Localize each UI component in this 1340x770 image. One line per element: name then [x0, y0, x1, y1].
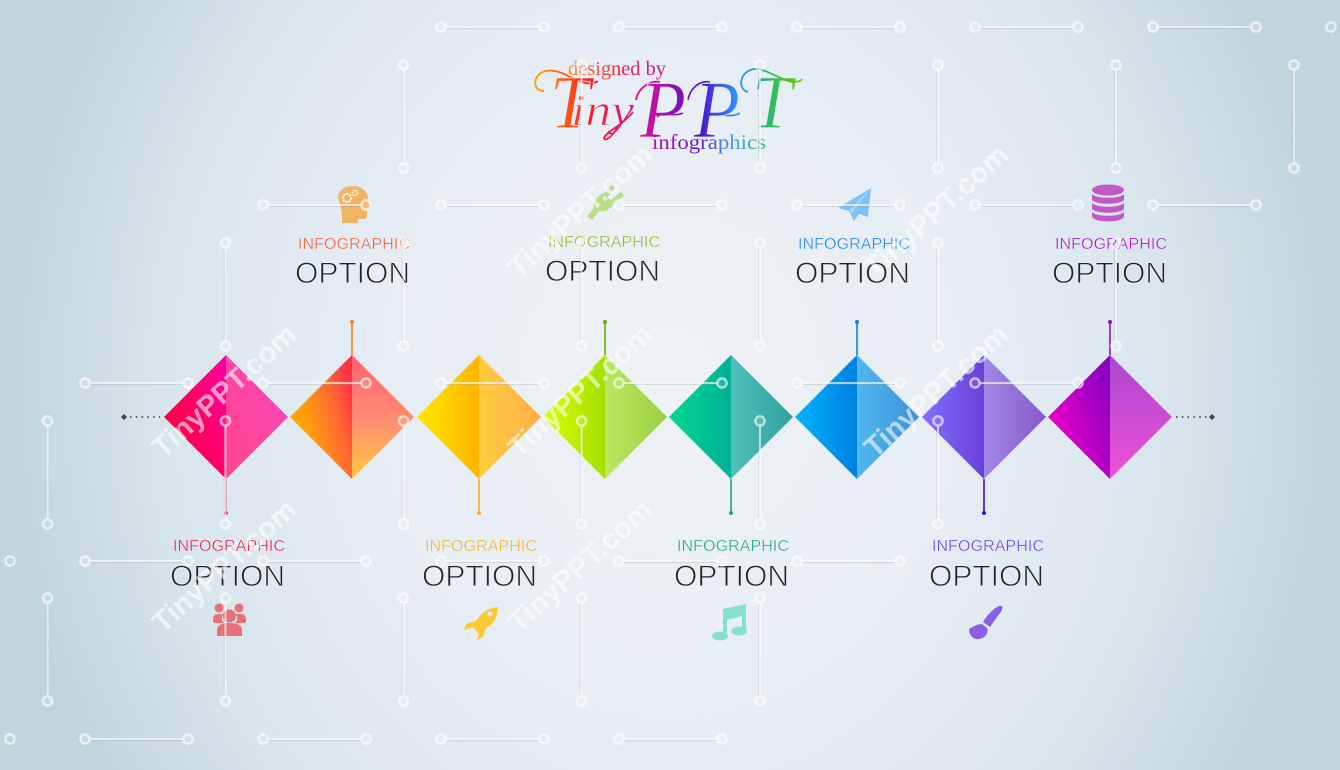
label: option 3 — [422, 538, 537, 593]
icon: paint brush — [969, 606, 1002, 639]
diamond 6: blue — [795, 320, 919, 479]
label: option 6 — [795, 236, 910, 290]
icon: music notes — [712, 604, 747, 640]
label: option 8: INFOGRAPHIC — [1055, 236, 1167, 253]
label: option 3: OPTION — [422, 560, 537, 593]
diamond 1: pink — [164, 355, 288, 515]
label: option 1: INFOGRAPHIC — [173, 538, 285, 555]
label: option 7: OPTION — [929, 560, 1044, 593]
label: option 6: INFOGRAPHIC — [798, 236, 910, 253]
label: option 3: INFOGRAPHIC — [425, 538, 537, 555]
diamond 2: orange — [290, 320, 414, 479]
logo: designed by TinyPPT infographics — [535, 58, 802, 155]
label: option 6: OPTION — [795, 257, 910, 290]
logo: designed by TinyPPT infographics: iny — [571, 86, 635, 135]
timeline connector: left dotted end — [121, 414, 160, 420]
logo: designed by TinyPPT infographics: designed by — [568, 58, 666, 80]
label: option 4: INFOGRAPHIC — [548, 234, 660, 251]
diamond 3: yellow — [417, 355, 541, 515]
watermarks: TinyPPT.com — [502, 319, 659, 464]
label: option 7: INFOGRAPHIC — [932, 538, 1044, 555]
logo: designed by TinyPPT infographics: T — [550, 61, 594, 145]
icon: people group — [213, 604, 246, 636]
watermarks: TinyPPT.com — [146, 494, 303, 639]
label: option 2: INFOGRAPHIC — [298, 236, 410, 253]
label: option 5: INFOGRAPHIC — [677, 538, 789, 555]
watermarks: TinyPPT.com — [146, 319, 303, 464]
label: option 1: OPTION — [170, 560, 285, 593]
watermarks: TinyPPT.com — [858, 319, 1015, 464]
diamond 7: violet — [922, 355, 1046, 515]
label: option 2: OPTION — [295, 257, 410, 290]
watermarks: TinyPPT.com — [502, 494, 659, 639]
label: option 8: OPTION — [1052, 257, 1167, 290]
icon: paper plane — [838, 188, 871, 221]
label: option 5: OPTION — [674, 560, 789, 593]
watermarks — [146, 139, 1015, 639]
diamond 8: magenta — [1048, 320, 1172, 479]
diamond 5: teal — [669, 355, 793, 515]
logo: designed by TinyPPT infographics: P — [639, 64, 686, 155]
diamond 4: lime — [543, 320, 667, 479]
icon: plug — [587, 188, 621, 220]
watermarks: TinyPPT.com — [858, 139, 1015, 284]
icon: rocket — [464, 607, 498, 640]
label: option 8 — [1052, 236, 1167, 290]
label: option 5 — [674, 538, 789, 593]
logo: designed by TinyPPT infographics: T — [752, 61, 796, 145]
watermarks: TinyPPT.com — [502, 139, 659, 284]
icon: head with gears — [338, 186, 371, 223]
label: option 7 — [929, 538, 1044, 593]
timeline connector: right dotted end — [1176, 414, 1215, 420]
icon: database — [1092, 184, 1124, 222]
label: option 4: OPTION — [545, 255, 660, 288]
logo: designed by TinyPPT infographics: P — [693, 64, 740, 155]
label: option 1 — [170, 538, 285, 593]
label: option 2 — [295, 236, 410, 290]
label: option 4 — [545, 234, 660, 288]
logo: designed by TinyPPT infographics: infographics — [652, 130, 766, 154]
